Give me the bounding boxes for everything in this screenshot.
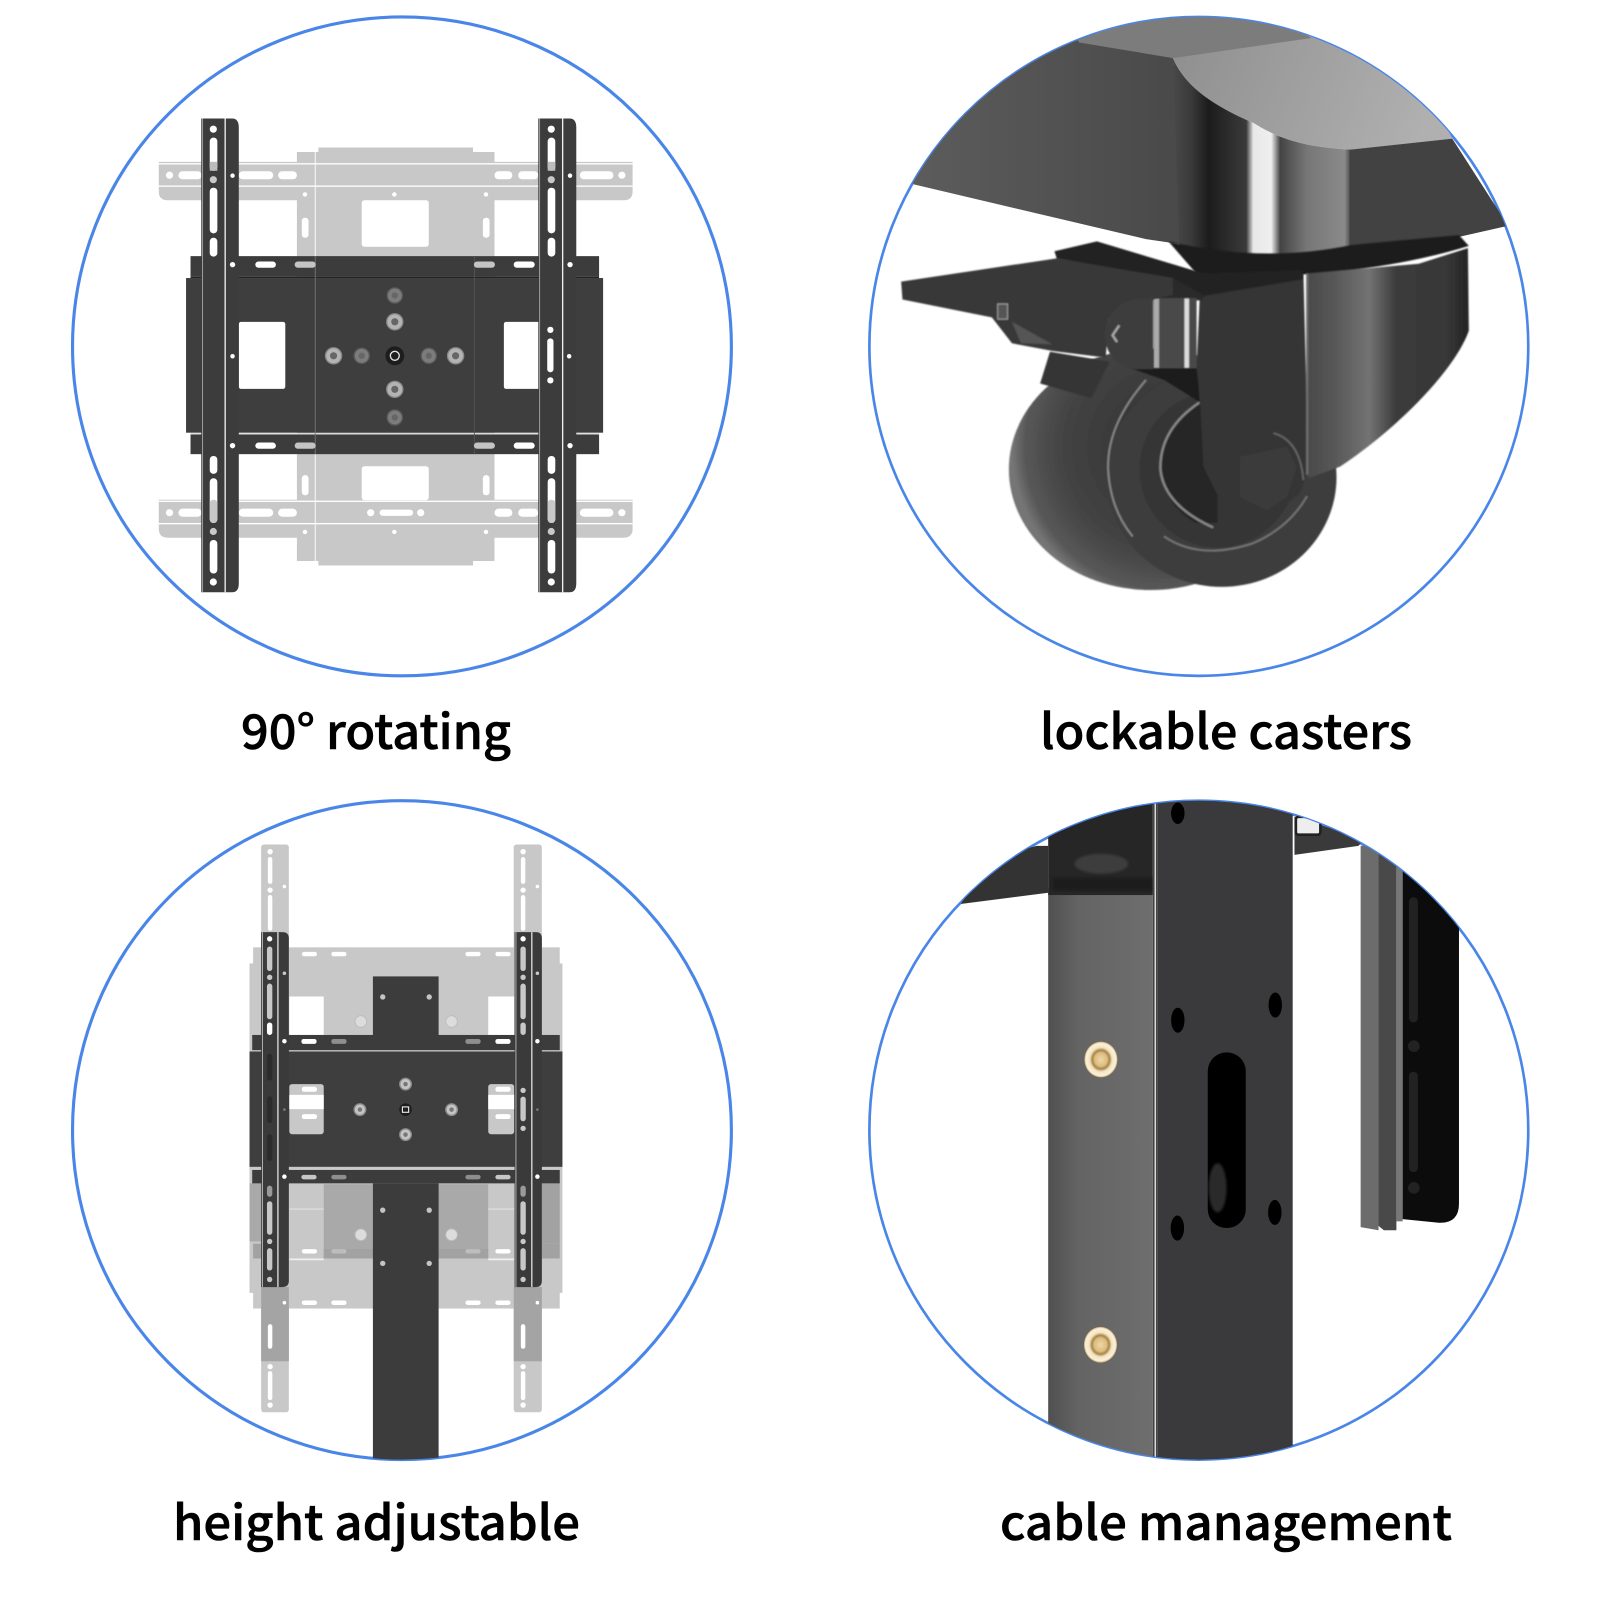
circle outline <box>73 801 731 1460</box>
circle outline <box>869 801 1528 1460</box>
label: 90 rotating: 90° rotating <box>241 693 511 763</box>
mounting plate <box>250 1035 562 1183</box>
cart base <box>905 9 1508 257</box>
label: height adjustable: height adjustable <box>173 1484 580 1554</box>
circle outline <box>73 17 731 676</box>
column <box>373 976 439 1463</box>
back bracket <box>961 817 1459 1230</box>
ghost mount: rotated position <box>159 148 633 565</box>
pole right face <box>1153 799 1293 1469</box>
left vertical rail <box>201 118 239 592</box>
swivel housing <box>1151 235 1469 513</box>
pole left face <box>1048 799 1153 1469</box>
panel: height adjustable <box>73 801 731 1463</box>
label: lockable casters: lockable casters <box>1040 693 1412 763</box>
left vertical rail <box>261 932 289 1287</box>
panel: 90 degree rotating <box>73 17 731 676</box>
right vertical rail <box>515 932 542 1287</box>
label: cable management: cable management <box>1000 1484 1452 1554</box>
ghost positions of mount <box>250 845 562 1412</box>
right vertical rail <box>538 118 576 592</box>
circle outline <box>869 17 1528 676</box>
brass bolts <box>1084 1042 1117 1363</box>
pole holes <box>1171 803 1282 1241</box>
brake pedal <box>901 241 1303 398</box>
mounting plate <box>186 256 603 454</box>
panel: cable management <box>869 799 1528 1469</box>
panel: lockable casters <box>869 9 1528 676</box>
screws <box>354 1078 457 1140</box>
screws <box>326 288 464 425</box>
caster wheel <box>1009 349 1337 590</box>
